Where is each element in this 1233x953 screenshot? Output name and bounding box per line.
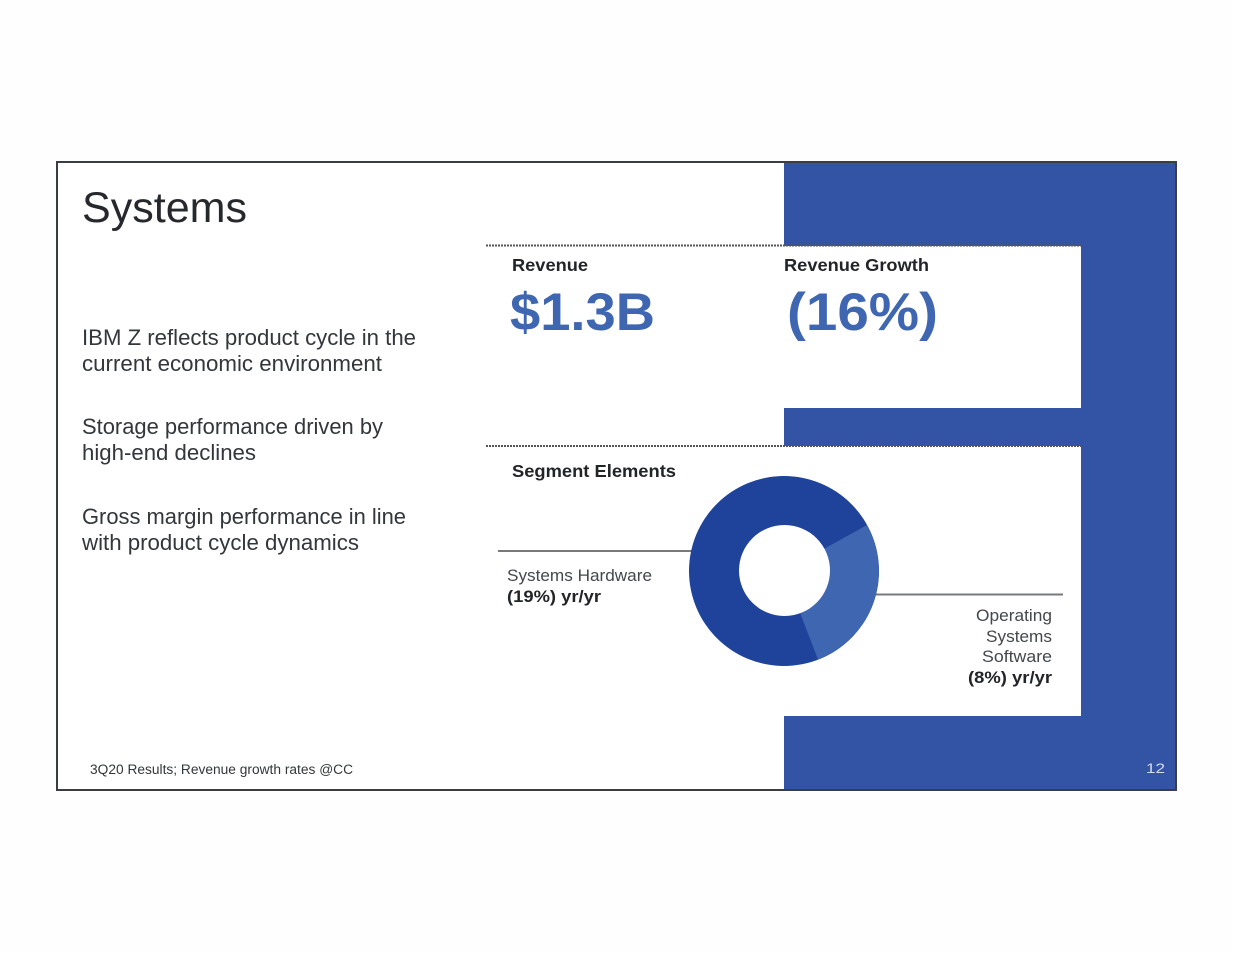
metric: revenue value: $1.3B [510,283,655,342]
label: operating systems software [968,606,1052,687]
leader line: systems hardware [498,550,692,552]
heading: segment elements: Segment Elements [512,461,676,481]
title: Systems [82,184,247,232]
text block: gross margin: with product cycle dynamics [81,530,359,555]
text block: storage: Storage performance driven by [82,414,383,439]
text block: gross margin: Gross margin performance in line [82,504,406,529]
donut segment: systems hardware [689,476,879,666]
label: operating systems software: Operating [976,606,1052,625]
label: systems hardware: Systems Hardware [507,566,652,585]
label: operating systems software: (8%) yr/yr [968,668,1052,687]
text block: gross margin [81,504,406,555]
text block: storage [82,414,383,465]
text block: storage: high-end declines [82,440,256,465]
text block: IBM Z: current economic environment [82,351,382,376]
panel: segment white card [784,446,1081,716]
leader line: operating systems software [876,594,1063,596]
footnote: 3Q20 Results; Revenue growth rates @CC [90,762,353,777]
text block: IBM Z [82,325,416,376]
metric: revenue growth value: (16%) [787,283,938,342]
panel: slide frame [57,162,1176,790]
heading: revenue: Revenue [512,255,588,275]
label: systems hardware: (19%) yr/yr [507,587,601,606]
panel: revenue white card [784,246,1081,408]
page number: 12 [1146,760,1165,776]
label: systems hardware [507,566,652,606]
donut hole [739,525,830,616]
donut chart [689,476,879,666]
label: operating systems software: Software [982,647,1052,666]
donut segment: operating systems software [784,525,879,660]
label: operating systems software: Systems [986,627,1052,646]
text block: IBM Z: IBM Z reflects product cycle in the [82,325,416,350]
panel: blue background block [784,163,1175,789]
heading: revenue growth: Revenue Growth [784,255,929,275]
